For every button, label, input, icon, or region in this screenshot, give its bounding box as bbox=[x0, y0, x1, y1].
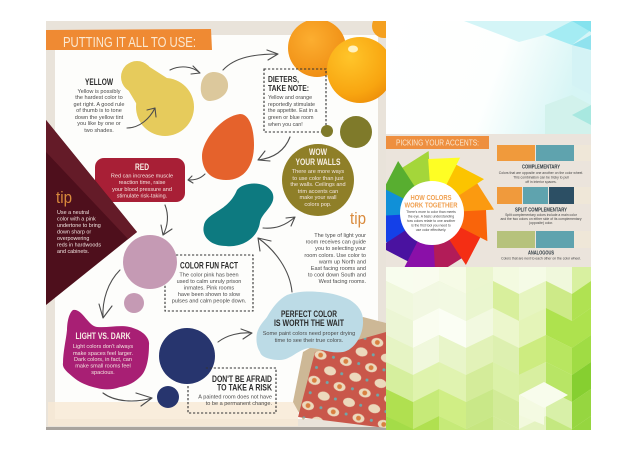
heading banner: picking your accents: PICKING YOUR ACCENTS: bbox=[396, 138, 479, 148]
callout blob: light vs dark: LIGHT VS. DARK bbox=[76, 331, 131, 341]
arrow: beige to dieters bbox=[223, 50, 278, 70]
wheel centre: how colors work together: HOW COLORS bbox=[410, 193, 452, 202]
callout blob: perfect color: PERFECT COLOR bbox=[281, 309, 337, 319]
tip panel: maroon: down sharp or bbox=[57, 230, 91, 236]
text block: yellow: you like by one or bbox=[77, 121, 121, 127]
callout: dieters take note: green or blue room bbox=[268, 115, 314, 121]
callout: red: RED bbox=[135, 162, 149, 172]
callout: red: Red can increase muscle bbox=[111, 174, 173, 180]
tip text block: light: tip bbox=[350, 209, 366, 228]
callout blob: light vs dark bbox=[63, 310, 149, 389]
panel: picking your accents bbox=[386, 134, 591, 267]
tip text block: light: room receives can guide bbox=[306, 240, 366, 246]
arrow: light blue to teal bbox=[258, 238, 292, 292]
callout: don't be afraid: DON'T BE AFRAID bbox=[212, 374, 272, 384]
swatch: split complementary: SPLIT COMPLEMENTARY bbox=[515, 208, 568, 214]
wheel centre: how colors work together: use color effectively. bbox=[416, 228, 446, 232]
text block: yellow: the hardest color to bbox=[75, 95, 123, 101]
text block: yellow: two shades. bbox=[84, 128, 114, 134]
paint drops: pink bbox=[123, 235, 177, 313]
callout: dieters take note: when you can! bbox=[267, 122, 303, 128]
tip text block: light: The type of light your bbox=[314, 233, 366, 239]
callout: color fun fact bbox=[165, 255, 253, 311]
heading banner: putting it all to use: PUTTING IT ALL TO USE: bbox=[63, 34, 196, 51]
swatch: analogous bbox=[497, 231, 591, 260]
paint blob: teal bbox=[203, 184, 273, 246]
swatch: complementary bbox=[497, 145, 591, 184]
text block: yellow: Yellow is possibly bbox=[78, 89, 121, 95]
paint blob: orange bbox=[202, 114, 254, 180]
swatch: analogous: Colors that are next to each other on the color wheel. bbox=[501, 256, 581, 260]
tip text block: light: warm up North and bbox=[318, 260, 366, 266]
callout: dieters take note: TAKE NOTE: bbox=[268, 83, 309, 93]
tip text block: light: you to selecting your bbox=[315, 246, 366, 252]
swatch: complementary: This combination can be tricky to pull bbox=[513, 176, 569, 180]
callout circle: wow your walls: YOUR WALLS bbox=[296, 157, 340, 167]
callout blob: light vs dark: Light colors don't always bbox=[73, 344, 133, 350]
tip panel: maroon: reds in hardwoods bbox=[57, 242, 101, 248]
callout: don't be afraid bbox=[188, 368, 276, 413]
callout: color fun fact: The color pink has been bbox=[179, 272, 239, 278]
orange fruit bbox=[288, 21, 386, 103]
arrow: dieters to orange blob bbox=[258, 137, 290, 161]
fabric swatches bbox=[293, 317, 386, 428]
arrow: yellow to beige bbox=[170, 66, 200, 74]
swatch: split complementary: Split complementary colors include a main color bbox=[505, 213, 578, 217]
paint blob: yellow bbox=[121, 61, 194, 136]
callout blob: light vs dark: Dark colors, in fact, can bbox=[74, 357, 132, 363]
color wheel bbox=[386, 151, 494, 267]
tip panel: maroon: Use a neutral bbox=[57, 210, 89, 216]
tip panel: maroon: overpowering bbox=[57, 236, 89, 242]
callout: color fun fact: inmates. Pink rooms bbox=[184, 286, 234, 292]
callout circle: wow your walls: the walls. Ceilings and bbox=[290, 182, 346, 188]
tip panel: maroon: and cabinets. bbox=[57, 249, 89, 255]
paint drops: navy bbox=[157, 328, 215, 408]
text block: yellow: of thumb is to tone bbox=[76, 108, 122, 114]
wheel centre: how colors work together bbox=[400, 181, 464, 245]
swatch: complementary: COMPLEMENTARY bbox=[522, 164, 561, 170]
panel: top teal geometric background bbox=[386, 21, 591, 134]
callout: dieters take note bbox=[264, 69, 326, 132]
text block: yellow: get right. A good rule bbox=[74, 102, 124, 108]
tip text block: light: to cool down South and bbox=[308, 272, 366, 278]
paint blob: beige bbox=[201, 72, 228, 101]
callout circle: wow your walls: trim accents can bbox=[298, 189, 338, 195]
tip text block: light: room colors. Use color to bbox=[304, 253, 366, 259]
swatch: complementary: Colors that are opposite one another on the color wheel. bbox=[499, 171, 583, 175]
callout: dieters take note: the appetite. Eat in a bbox=[268, 108, 317, 114]
callout: red: your blood pressure and bbox=[112, 187, 172, 193]
callout: color fun fact: COLOR FUN FACT bbox=[180, 260, 238, 270]
callout circle: wow your walls: colors pop. bbox=[304, 202, 332, 208]
panel: bottom green geometric background bbox=[386, 267, 591, 430]
callout blob: perfect color bbox=[256, 291, 363, 360]
heading banner: putting it all to use bbox=[46, 29, 212, 51]
arrow: orange blob to red bbox=[188, 174, 205, 183]
callout blob: perfect color: time to see their true colors. bbox=[275, 338, 344, 344]
callout blob: perfect color: IS WORTH THE WAIT bbox=[274, 318, 344, 328]
callout: color fun fact: have been shown to slow bbox=[178, 292, 241, 298]
callout: don't be afraid: A painted room does not have bbox=[198, 394, 272, 400]
tip panel: maroon: undertone to bring bbox=[57, 223, 101, 229]
callout circle: wow your walls: to use color than just bbox=[292, 176, 344, 182]
swatch: split complementary: (opposite) color. bbox=[529, 221, 553, 225]
wheel centre: how colors work together: There's more to color than meets bbox=[406, 210, 456, 214]
callout blob: light vs dark: spacious. bbox=[91, 370, 115, 376]
tip text block: light: East facing rooms and bbox=[311, 266, 366, 272]
arrow: pink to magenta bbox=[99, 270, 120, 318]
tip panel: maroon: color with a pink bbox=[57, 216, 96, 222]
panel: left magazine page bbox=[46, 14, 396, 430]
callout: dieters take note: Yellow and orange bbox=[268, 95, 312, 101]
tip panel: maroon bbox=[46, 120, 137, 305]
callout: dieters take note: DIETERS, bbox=[268, 74, 299, 84]
arrow: red to pink bbox=[161, 205, 172, 235]
wheel centre: how colors work together: the eye. A basic understanding bbox=[408, 214, 454, 218]
swatch: analogous: ANALOGOUS bbox=[528, 250, 555, 256]
callout circle: wow your walls bbox=[282, 144, 354, 216]
tip panel: maroon: tip bbox=[56, 188, 72, 207]
callout: color fun fact: pulses and calm people down. bbox=[172, 298, 247, 304]
swatch: complementary: off in interior spaces. bbox=[525, 180, 557, 184]
wheel centre: how colors work together: WORK TOGETHER bbox=[404, 200, 458, 210]
wheel centre: how colors work together: is the first tool you need to bbox=[411, 224, 451, 228]
swatch: split complementary bbox=[497, 187, 591, 225]
arrow: into yellow blob bbox=[127, 108, 156, 128]
callout blob: light vs dark: make spaces feel larger. bbox=[73, 351, 134, 357]
arrow: magenta to navy bbox=[103, 393, 152, 406]
callout: red: reaction time, raise bbox=[119, 180, 165, 186]
callout: dieters take note: reportedly stimulate bbox=[268, 102, 315, 108]
text block: yellow bbox=[74, 77, 124, 134]
swatch: split complementary: and the two colors on either side of its complementary bbox=[500, 217, 582, 221]
callout: don't be afraid: to be a permanent change. bbox=[206, 401, 272, 407]
heading banner: picking your accents bbox=[386, 136, 489, 149]
callout: red: stimulate risk-taking. bbox=[117, 194, 168, 200]
callout blob: light vs dark: make small rooms feel bbox=[75, 364, 131, 370]
callout: color fun fact: used to calm unruly prison bbox=[177, 279, 241, 285]
text block: yellow: down the yellow tint bbox=[75, 115, 124, 121]
callout: don't be afraid: TO TAKE A RISK bbox=[217, 382, 272, 392]
tip text block: light bbox=[304, 209, 366, 285]
callout: red bbox=[95, 158, 185, 202]
arrow: navy to light blue bbox=[218, 329, 252, 342]
arrow: tip to teal bbox=[263, 217, 295, 228]
callout circle: wow your walls: There are more ways bbox=[292, 169, 344, 175]
wheel centre: how colors work together: how colors relate to one another bbox=[407, 219, 456, 223]
callout circle: wow your walls: make your wall bbox=[300, 195, 336, 201]
paint drops: olive bbox=[321, 116, 372, 148]
tip text block: light: West facing rooms. bbox=[319, 279, 366, 285]
callout blob: perfect color: Some paint colors need proper drying bbox=[263, 331, 355, 337]
text block: yellow: YELLOW bbox=[85, 77, 113, 87]
callout circle: wow your walls: WOW bbox=[309, 147, 327, 157]
